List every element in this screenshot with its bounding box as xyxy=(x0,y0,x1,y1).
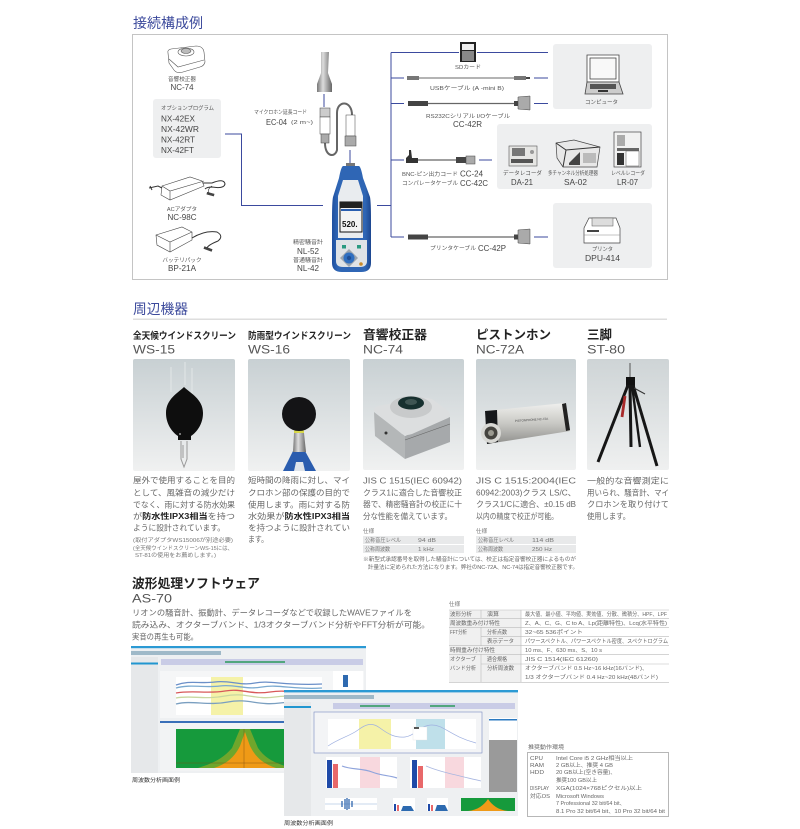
description: WS-16: クロホン部の保護の目的で xyxy=(248,487,350,497)
text: sound level meter labels: NL-52 xyxy=(297,246,319,256)
text: battery label: バッテリパック xyxy=(162,257,202,264)
description: NC-72A: JIS C 1515:2004(IEC xyxy=(476,477,576,486)
spec table: software: 時間重み付け特性 xyxy=(450,646,496,654)
product: WS-15 xyxy=(133,330,236,559)
panel: recommended environment: RAM xyxy=(530,763,545,769)
product: NC-72A xyxy=(476,328,576,553)
icon: SD card xyxy=(460,42,476,62)
text: battery label: BP-21A xyxy=(168,263,196,273)
panel: option programs: NX-42EX xyxy=(161,114,195,124)
text: AC adapter label xyxy=(167,205,197,222)
product: NC-74 xyxy=(363,327,464,553)
icon: microphone extension cord xyxy=(320,103,356,155)
spec table: software: オクターブバンド 0.5 Hz~16 kHz(16バンド)、 xyxy=(525,664,648,672)
panel: option programs: オプションプログラム xyxy=(161,104,214,112)
text: printer cable: CC-42P xyxy=(478,243,506,253)
product name: WS-15: WS-15 xyxy=(133,342,175,356)
description: NC-74 xyxy=(363,477,462,521)
heading: waveform software: 波形処理ソフトウェア xyxy=(132,576,260,591)
text: AC adapter label: NC-98C xyxy=(168,212,196,222)
heading: connection example: 接続構成例 xyxy=(133,15,203,31)
description: WS-15 xyxy=(133,475,235,533)
panel: option programs: NX-42WR xyxy=(161,124,199,134)
description: NC-74: JIS C 1515(IEC 60942) xyxy=(363,477,462,486)
description: ST-80: 用いられ、騒音計、マイ xyxy=(587,488,669,498)
text: BNC and comparator cable: CC-24 xyxy=(460,168,483,178)
spec table: software: 周波数重み付け特性 xyxy=(450,619,501,627)
icon: sound level meter xyxy=(332,163,371,272)
description: software: 読み込み、オクターブバンド、1/3オクターブバンド分析やFFT分析が可能。 xyxy=(132,619,430,629)
panel: recommended environment: CPU xyxy=(530,756,543,762)
text: extension cord label xyxy=(254,108,313,127)
spec table: software: バンド分析 xyxy=(450,664,477,672)
text: sound level meter labels xyxy=(293,238,323,273)
spec table: NC-74: 仕様 xyxy=(363,527,375,535)
spec table: software: 波形分析 xyxy=(450,610,473,618)
product: WS-16 xyxy=(248,330,351,544)
heading: waveform software: AS-70 xyxy=(132,592,172,606)
description: NC-72A: 60942:2003)クラス LS/C、 xyxy=(476,489,576,498)
text: extension cord label: (2 m~) xyxy=(291,120,313,126)
text: level recorder: LR-07 xyxy=(617,177,638,187)
text: extension cord label: マイクロホン延長コード xyxy=(254,108,307,116)
description: WS-16: を持つように設計されてい xyxy=(248,523,350,533)
text: data recorder: データレコーダ xyxy=(503,169,542,177)
spec table: software: 32~65 536ポイント xyxy=(525,628,583,636)
spec table: NC-72A: 250 Hz xyxy=(532,547,552,553)
note: calibrator footnote: 計量法に定められた方法になります。弊社のNC-72A、NC-74は指定音響校正器です。 xyxy=(368,563,578,571)
description: software: リオンの騒音計、振動計、データレコーダなどで収録したWAVEファイルを xyxy=(132,608,412,618)
spec table: software: JIS C 1514(IEC 61260) xyxy=(525,657,598,663)
heading: waveform software xyxy=(132,576,260,606)
text: level recorder xyxy=(611,169,645,187)
description: ST-80: クロホンを取り付けて xyxy=(587,499,669,509)
text: level recorder: レベルレコーダ xyxy=(611,169,645,177)
note: calibrator footnote xyxy=(363,555,578,571)
spec table: NC-74 xyxy=(363,527,464,553)
product name: ST-80: 三脚 xyxy=(587,327,612,342)
description: WS-15: が防水性IPX3相当 を持つ xyxy=(133,511,235,521)
panel: computer background xyxy=(553,44,652,109)
panel: recommended environment: Microsoft Windows xyxy=(556,794,604,800)
panel: recommended environment: 20 GB以上(空き容量)、 xyxy=(556,768,616,776)
description: NC-72A: 以内の精度で校正が可能。 xyxy=(476,511,558,521)
heading: peripherals: 周辺機器 xyxy=(133,301,188,317)
text: printer: DPU-414 xyxy=(585,253,620,263)
description: ST-80: 一般的な音響測定に xyxy=(587,476,669,486)
spec table: software: 10 ms、F、630 ms、S、10 s xyxy=(525,648,602,654)
panel: recommended environment: 2 GB以上、推奨 4 GB xyxy=(556,761,613,769)
icon: laptop computer xyxy=(585,55,623,94)
spec table: NC-72A xyxy=(476,527,576,553)
text: printer xyxy=(585,245,620,263)
panel: recommended environment: Intel Core i5 2 GHz相当以上 xyxy=(556,754,634,762)
spec table: NC-72A: 公称周波数 xyxy=(478,545,503,553)
description: ST-80: 使用します。 xyxy=(587,511,630,521)
text: RS232C cable: RS232Cシリアル I/Oケーブル xyxy=(426,112,510,120)
panel: recommended environment xyxy=(528,743,668,816)
note: calibrator footnote: ※新型式承認番号を取得した騒音計については、校正は指定音響校正器によるものが xyxy=(363,555,577,563)
spec table: software: 分析周波数 xyxy=(487,664,515,672)
spec table: software: 適合規格 xyxy=(487,655,508,663)
description: software: 実音の再生も可能。 xyxy=(132,632,198,642)
description: NC-74: 器で、精密騒音計の校正に十 xyxy=(363,499,462,509)
text: calibrator label xyxy=(168,75,196,92)
icon: level recorder LR-07 xyxy=(614,132,641,167)
spec table: NC-72A: 仕様 xyxy=(476,527,488,535)
spec table: NC-74: 1 kHz xyxy=(418,547,434,553)
description: ST-80 xyxy=(587,476,669,521)
product name: NC-74: 音響校正器 xyxy=(363,327,427,342)
text: printer: プリンタ xyxy=(592,245,613,253)
icon: data recorder DA-21 xyxy=(509,146,537,166)
product photo: NC-72A pistonphone xyxy=(476,359,576,470)
spec table: software: 演算 xyxy=(487,610,500,618)
panel: option programs xyxy=(153,99,221,158)
description: WS-16: 使用します。雨に対する防 xyxy=(248,499,350,509)
spec table: software: 分析点数 xyxy=(487,628,508,636)
spec table: NC-74: 公称周波数 xyxy=(365,545,390,553)
product name: WS-16 xyxy=(248,330,351,356)
product: ST-80 xyxy=(587,327,669,521)
icon: USB cable xyxy=(407,76,530,80)
product name: WS-16: WS-16 xyxy=(248,342,290,356)
text: analyzer xyxy=(548,169,598,187)
description: WS-16 xyxy=(248,475,350,544)
note: WS-15: (取付アダプタWS15006が別途必要) xyxy=(133,536,233,544)
product photo: WS-16 windscreen xyxy=(248,359,350,471)
text: BNC and comparator cable: BNC-ピン出力コード xyxy=(402,170,458,178)
description: software xyxy=(132,608,430,642)
text: calibrator label: NC-74 xyxy=(170,82,194,92)
connection lines xyxy=(225,52,548,237)
icon: sound level meter: 520. xyxy=(342,220,358,229)
product name: NC-72A xyxy=(476,328,551,356)
spec table: software: 仕様 xyxy=(449,600,461,608)
panel: recommended environment: XGA(1024×768ピクセル)以上 xyxy=(556,784,643,792)
panel: option programs: NX-42FT xyxy=(161,145,194,155)
spec table: NC-74: 公称音圧レベル xyxy=(365,536,401,544)
icon: analyzer SA-02 xyxy=(556,140,600,167)
text: RS232C cable: CC-42R xyxy=(453,119,482,129)
spec table: software: 表示データ xyxy=(487,637,514,645)
panel: recommended environment: 推奨動作環境 xyxy=(528,743,565,751)
product name: ST-80 xyxy=(587,327,625,356)
spec table: software: FFT分析 xyxy=(450,628,467,636)
text: sound level meter labels: NL-42 xyxy=(297,263,319,273)
panel: printer background xyxy=(553,203,652,268)
text: analyzer: SA-02 xyxy=(564,177,587,187)
icon: microphone xyxy=(317,52,332,92)
text: calibrator label: 音響校正器 xyxy=(168,75,196,83)
text: sound level meter labels: 精密騒音計 xyxy=(293,238,323,246)
product name: WS-15 xyxy=(133,330,236,356)
description: NC-72A: クラス1/Cに適合、±0.15 dB xyxy=(476,499,576,509)
description: WS-15: として、風雑音の減少だけ xyxy=(133,487,235,497)
text: analyzer: 多チャンネル分析処理器 xyxy=(548,169,598,177)
text: computer: コンピュータ xyxy=(585,98,618,106)
spec table: software: パワースペクトル、パワースペクトル密度、スペクトログラム xyxy=(525,637,669,645)
text: BNC and comparator cable: CC-42C xyxy=(460,178,488,188)
panel: recommended environment: 7 Professional 32 bit/64 bit、 xyxy=(556,801,625,807)
text: data recorder xyxy=(503,169,542,187)
spec table: NC-72A: 114 dB xyxy=(532,538,554,544)
text: RS232C cable xyxy=(426,112,510,129)
description: NC-74: 分な性能を備えています。 xyxy=(363,511,452,521)
panel: recommended environment: 推奨100 GB以上 xyxy=(556,776,598,784)
product name: NC-72A: NC-72A xyxy=(476,342,524,356)
text: caption 1: 周波数分析画面例 xyxy=(132,776,180,784)
text: extension cord label: EC-04 xyxy=(266,117,287,127)
product name: WS-16: 防雨型ウインドスクリーン xyxy=(248,330,351,342)
text: USB cable: USBケーブル (A -mini B) xyxy=(430,84,504,92)
description: NC-72A xyxy=(476,477,576,521)
icon: AC adapter xyxy=(149,177,225,200)
spec table: software: 1/3 オクターブバンド 0.4 Hz~20 kHz(48バンド) xyxy=(525,673,658,681)
screenshot: software window 1 xyxy=(131,646,366,773)
spec table: NC-72A: 公称音圧レベル xyxy=(478,536,514,544)
product name: NC-74 xyxy=(363,327,427,356)
screenshot: software window 2 xyxy=(284,690,518,816)
panel: recommended environment: DISPLAY xyxy=(530,786,549,792)
spec table: software: オクターブ xyxy=(450,655,477,663)
text: BNC and comparator cable xyxy=(402,168,488,188)
product name: NC-72A: ピストンホン xyxy=(476,328,551,342)
text: printer cable: プリンタケーブル xyxy=(430,244,476,252)
text: BNC and comparator cable: コンパレータケーブル xyxy=(402,179,458,187)
text: SD card: SDカード xyxy=(455,64,481,71)
spec table: software: 最大値、最小値、平均値、実効値、分散、微積分、HPF、LPF xyxy=(525,610,668,618)
panel: recommended environment: 対応OS xyxy=(530,792,550,800)
product photo: WS-15 windscreen xyxy=(133,359,235,471)
panel: connection diagram xyxy=(132,34,668,280)
product name: ST-80: ST-80 xyxy=(587,342,625,356)
text: AC adapter label: ACアダプタ xyxy=(167,205,197,213)
panel: recorders background xyxy=(497,124,652,189)
description: WS-15: でなく、雨に対する防水効果 xyxy=(133,499,235,509)
icon: calibrator NC-74 xyxy=(168,46,205,73)
text: printer cable xyxy=(430,243,506,253)
text: battery label xyxy=(162,257,202,273)
panel: recommended environment: HDD xyxy=(530,770,544,776)
icon: battery pack xyxy=(156,227,221,252)
description: NC-74: クラス1に適合した音響校正 xyxy=(363,488,462,498)
text: data recorder: DA-21 xyxy=(511,177,533,187)
text: caption 2: 周波数分析画面例 xyxy=(284,819,333,827)
icon: printer cable xyxy=(408,229,530,244)
text: sound level meter labels: 普通騒音計 xyxy=(293,256,323,264)
panel: option programs: NX-42RT xyxy=(161,134,195,144)
product photo: NC-74 calibrator xyxy=(363,359,464,470)
description: WS-16: 水効果が 防水性IPX3相当 xyxy=(248,511,350,521)
spec table: NC-74: 94 dB xyxy=(418,538,436,544)
note: WS-15 xyxy=(133,536,233,559)
panel: recommended environment: 8.1 Pro 32 bit/64 bit、10 Pro 32 bit/64 bit xyxy=(556,809,666,815)
product name: NC-74: NC-74 xyxy=(363,342,403,356)
description: WS-16: 短時間の降雨に対し、マイ xyxy=(248,475,350,485)
product photo: ST-80 tripod xyxy=(587,359,669,470)
note: WS-15: ST-81の使用をお薦めします。) xyxy=(135,551,216,559)
spec table: software xyxy=(449,600,669,682)
icon: RS232C cable xyxy=(408,96,530,110)
description: WS-16: ます。 xyxy=(248,535,268,544)
product photo: NC-72A pistonphone: PISTONPHONE NC-72A xyxy=(515,417,548,423)
description: WS-15: 屋外で使用することを目的 xyxy=(133,475,235,485)
icon: printer xyxy=(584,218,620,243)
description: WS-15: ように設計されています。 xyxy=(133,523,225,533)
icon: BNC cable xyxy=(406,150,475,164)
spec table: software: Z、A、C、G、C to A、Lp(距離特性)、Lcq(水平特性) xyxy=(525,619,667,627)
product name: WS-15: 全天候ウインドスクリーン xyxy=(133,330,236,342)
note: WS-15: (全天候ウインドスクリーンWS-15には、 xyxy=(133,544,233,552)
